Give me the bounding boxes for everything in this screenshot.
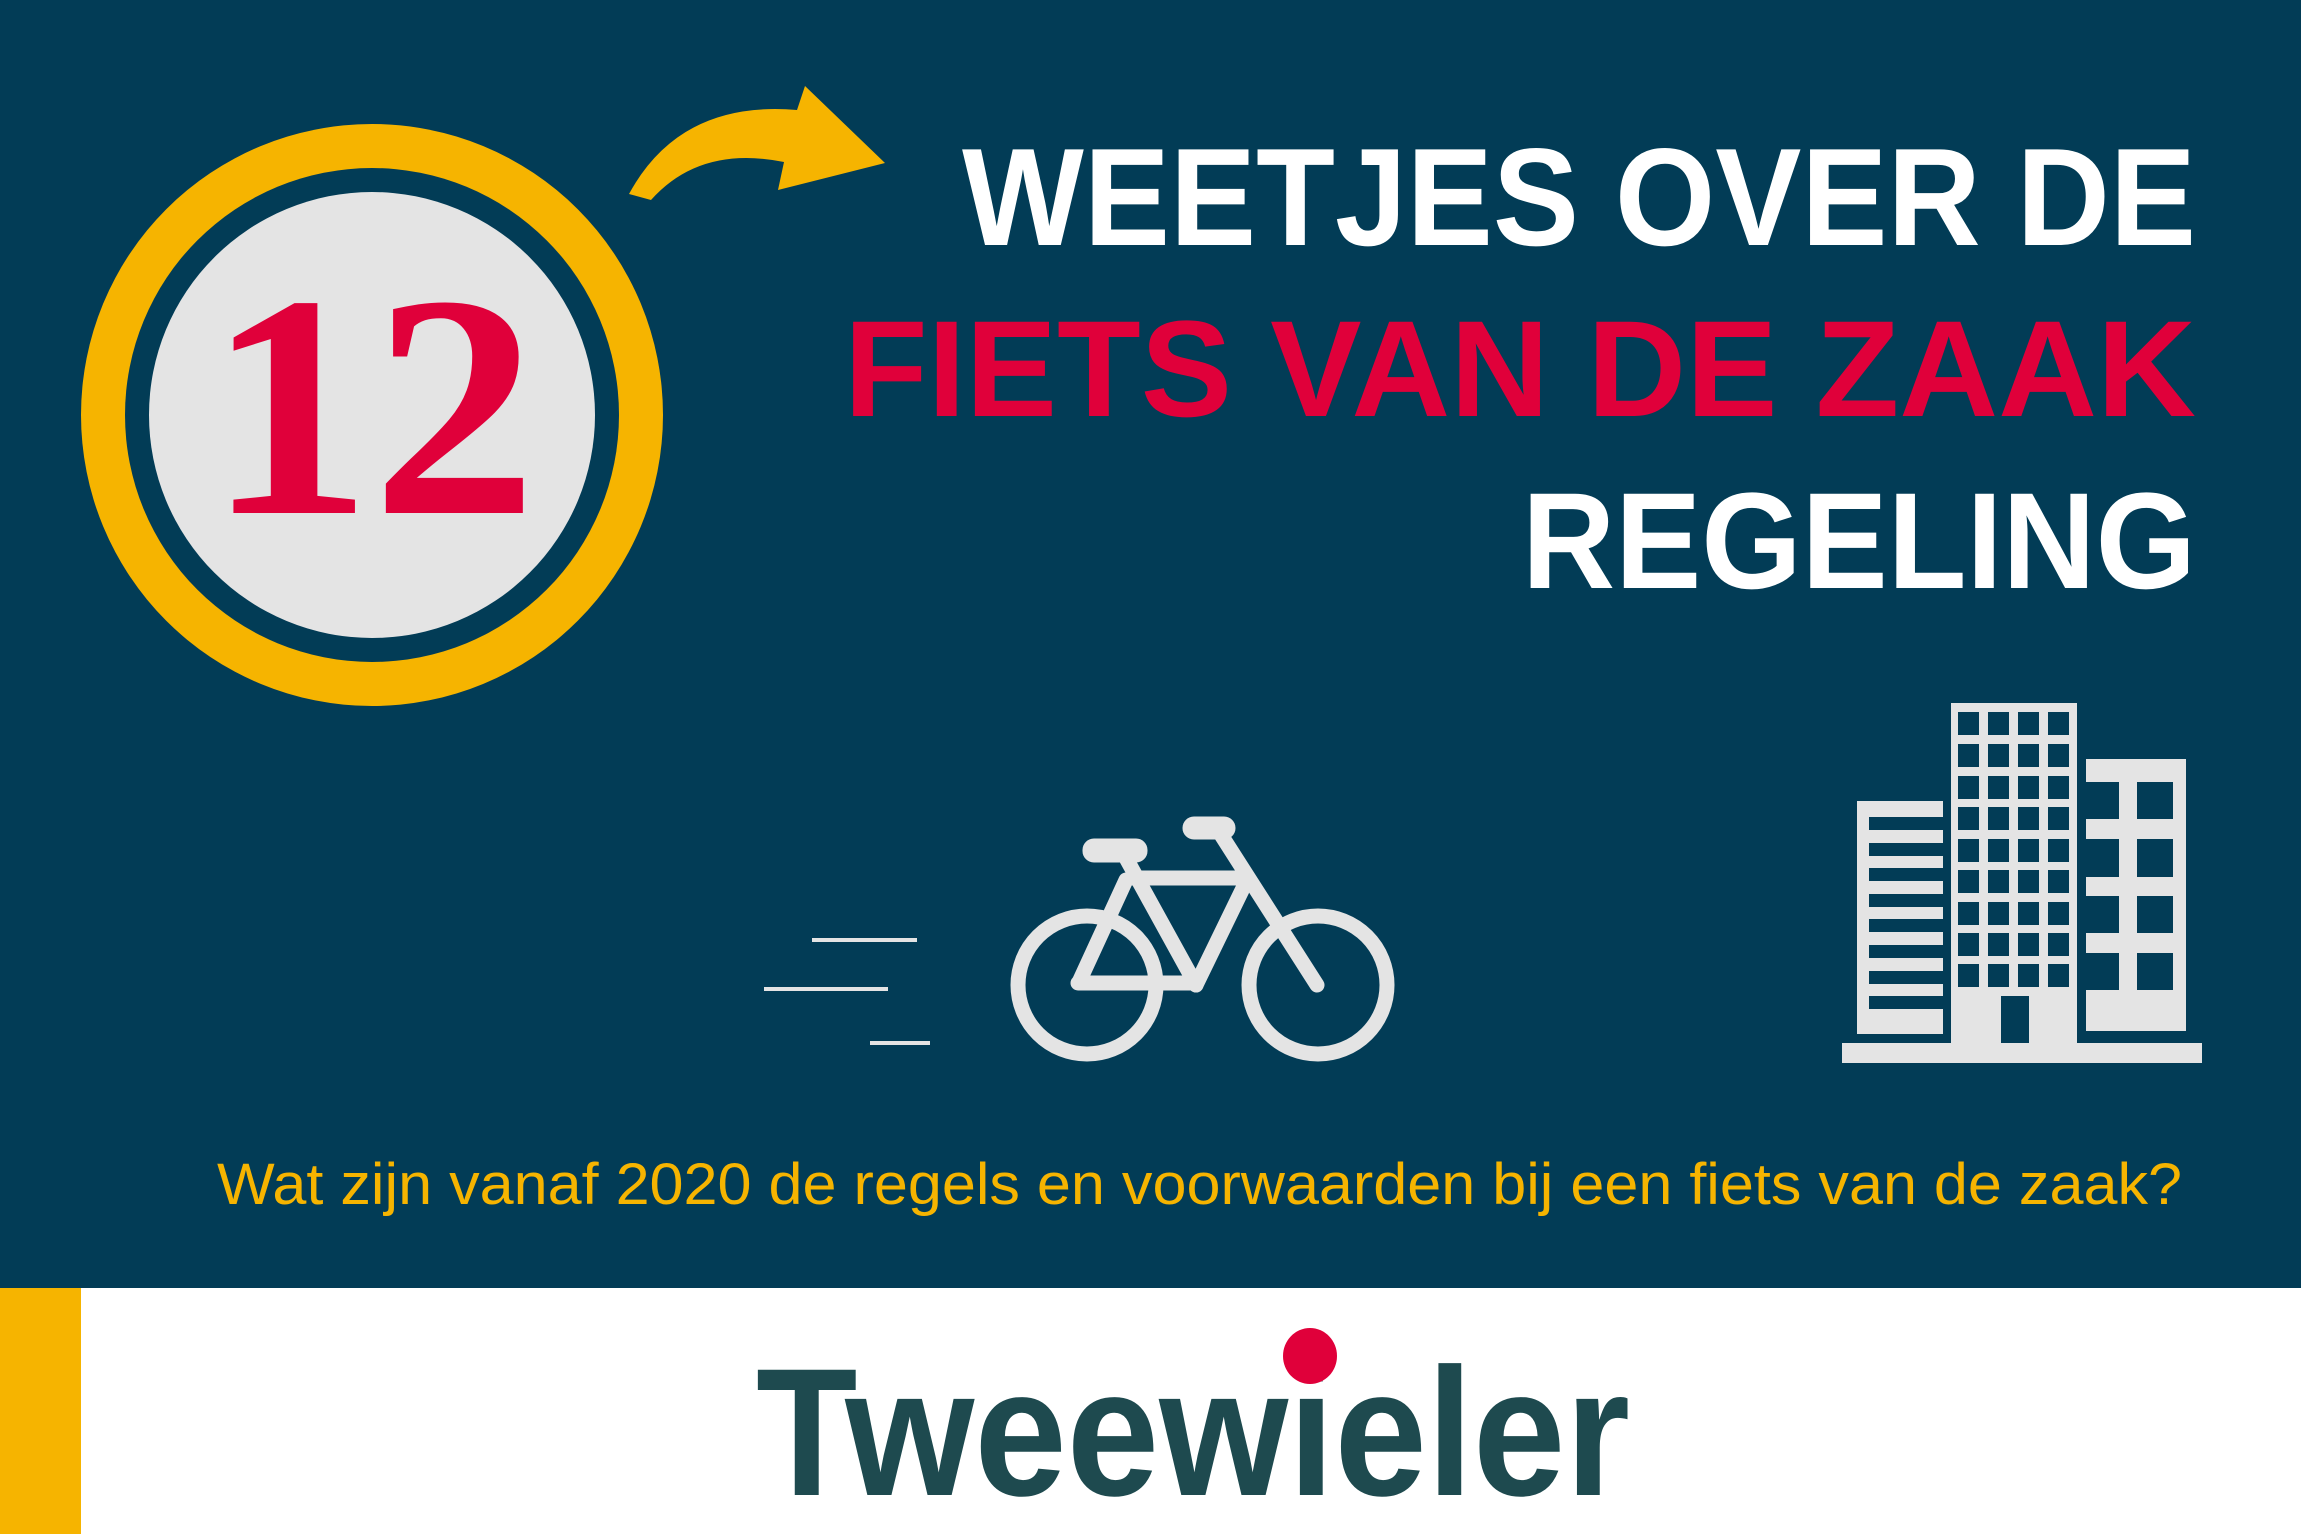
title: FIETS VAN DE ZAAK: [844, 293, 2196, 446]
icon: bicycle: [1018, 824, 1387, 1054]
title: REGELING: [1522, 465, 2196, 618]
title: WEETJES OVER DE: [962, 120, 2196, 275]
title: [844, 120, 2196, 618]
arrow: curved yellow: [629, 86, 885, 200]
badge: number 12: [81, 124, 663, 706]
logo: Tweewieler: Tweewieler: [756, 1330, 1630, 1534]
yellow strip: [0, 1288, 81, 1534]
icon: speed lines: [764, 940, 930, 1043]
badge: number 12: 12: [207, 230, 537, 582]
subtitle: Wat zijn vanaf 2020 de regels en voorwaarden bij een fiets van de zaak?: [217, 1152, 2182, 1217]
icon: office buildings: [1842, 703, 2202, 1063]
